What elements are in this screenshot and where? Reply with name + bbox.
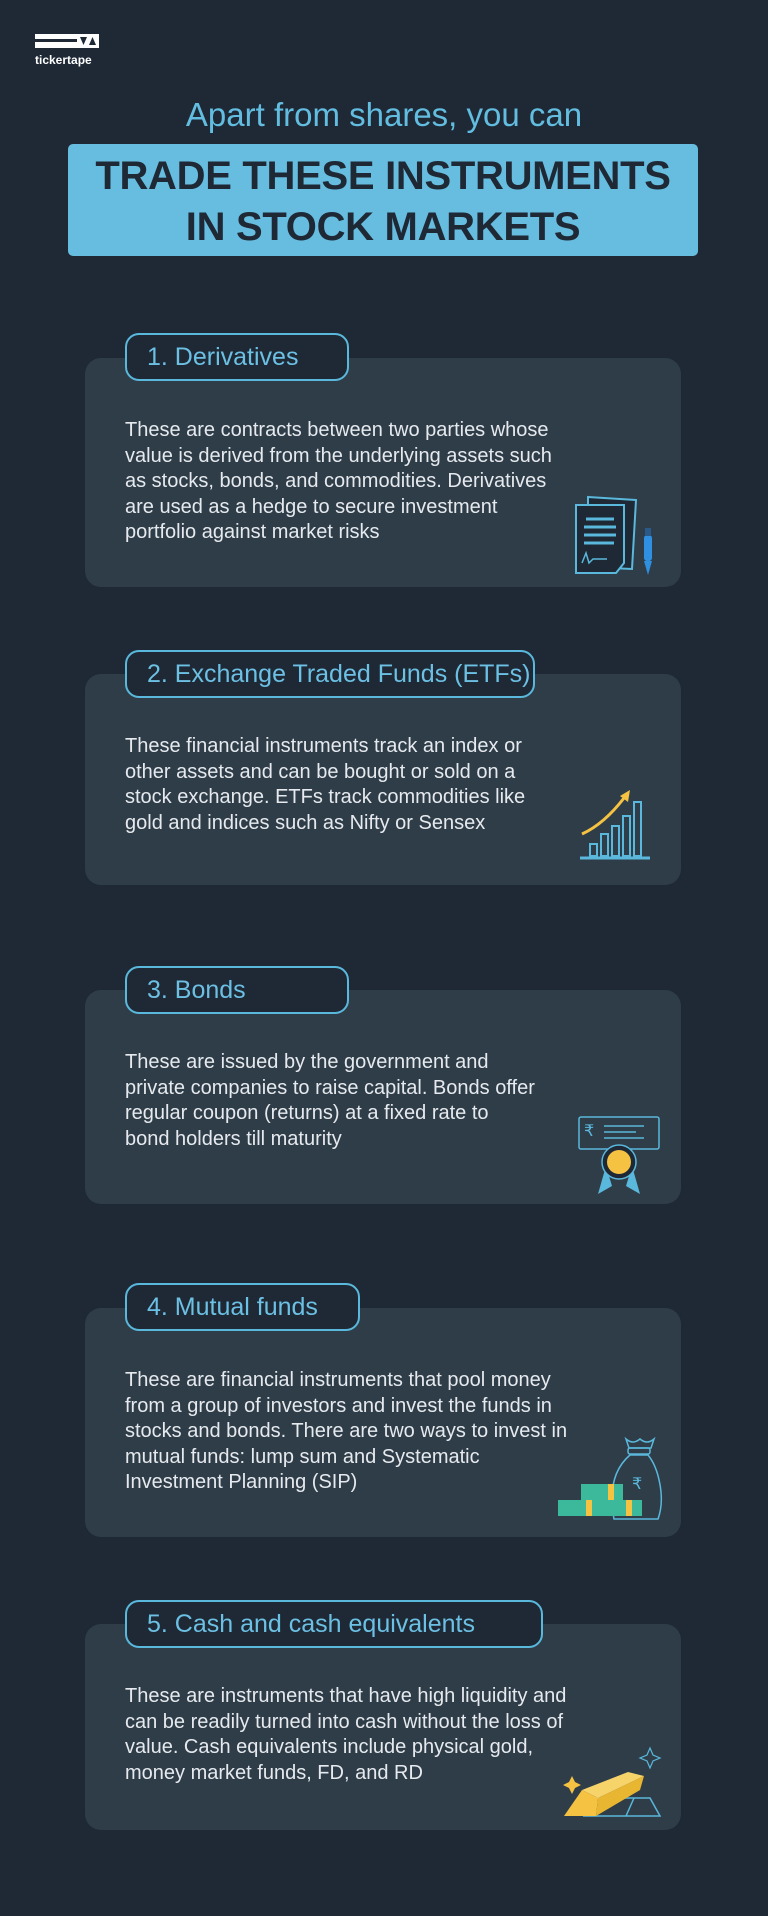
text: derivatives: are used as a hedge to secure investment <box>125 496 497 518</box>
text: bonds <box>125 1051 535 1150</box>
title box: IN STOCK MARKETS <box>186 205 580 249</box>
heading: bonds: 3. Bonds <box>147 976 246 1004</box>
logo <box>35 34 99 67</box>
icon: documents and pen <box>575 496 652 575</box>
text: derivatives: value is derived from the underlying assets such <box>125 445 552 467</box>
text: mutual funds: These are financial instruments that pool money <box>125 1369 551 1391</box>
text: bonds: These are issued by the government and <box>125 1051 489 1073</box>
text: derivatives: These are contracts between two parties whose <box>125 419 549 441</box>
heading: derivatives: 1. Derivatives <box>147 343 298 371</box>
heading: derivatives <box>125 333 349 381</box>
icon: bond certificate: ₹ <box>584 1121 594 1140</box>
text: mutual funds: stocks and bonds. There are two ways to invest in <box>125 1420 567 1442</box>
panel: ETFs <box>85 674 681 885</box>
title box: TRADE THESE INSTRUMENTS <box>95 154 671 198</box>
heading: bonds <box>125 966 349 1014</box>
icon: growth chart <box>580 790 650 860</box>
logo: tickertape <box>35 53 92 67</box>
text: mutual funds: mutual funds: lump sum and Systematic <box>125 1446 480 1468</box>
text: mutual funds: from a group of investors and invest the funds in <box>125 1395 552 1417</box>
text: bonds: bond holders till maturity <box>125 1128 342 1150</box>
panel: derivatives <box>85 358 681 587</box>
heading: cash equivalents <box>125 1600 543 1648</box>
text: bonds: private companies to raise capital. Bonds offer <box>125 1077 535 1099</box>
text: cash equivalents: can be readily turned into cash without the loss of <box>125 1711 563 1733</box>
text: cash equivalents <box>125 1685 566 1784</box>
title box <box>68 144 698 256</box>
icon: gold bar <box>563 1746 662 1817</box>
text: cash equivalents: money market funds, FD, and RD <box>125 1762 423 1784</box>
icon: money bag and notes: ₹ <box>632 1474 642 1493</box>
text: ETFs: stock exchange. ETFs track commodities like <box>125 786 525 808</box>
text: mutual funds <box>125 1369 567 1493</box>
heading: ETFs <box>125 650 535 698</box>
heading: mutual funds <box>125 1283 360 1331</box>
text: derivatives: as stocks, bonds, and commodities. Derivatives <box>125 470 546 492</box>
text: derivatives <box>125 419 552 543</box>
panel: mutual funds <box>85 1308 681 1537</box>
text: ETFs: other assets and can be bought or sold on a <box>125 761 515 783</box>
icon: money bag and notes <box>558 1437 662 1520</box>
text: cash equivalents: value. Cash equivalents include physical gold, <box>125 1736 533 1758</box>
heading: ETFs: 2. Exchange Traded Funds (ETFs) <box>147 660 531 688</box>
text: mutual funds: Investment Planning (SIP) <box>125 1471 357 1493</box>
heading: cash equivalents: 5. Cash and cash equivalents <box>147 1610 475 1638</box>
text: cash equivalents: These are instruments that have high liquidity and <box>125 1685 566 1707</box>
text: bonds: regular coupon (returns) at a fixed rate to <box>125 1102 489 1124</box>
text: ETFs: These financial instruments track an index or <box>125 735 522 757</box>
subtitle: Apart from shares, you can <box>186 96 582 133</box>
heading: mutual funds: 4. Mutual funds <box>147 1293 318 1321</box>
icon: bond certificate <box>578 1116 660 1194</box>
text: derivatives: portfolio against market risks <box>125 521 380 543</box>
panel: cash equivalents <box>85 1624 681 1830</box>
panel: bonds <box>85 990 681 1204</box>
text: ETFs: gold and indices such as Nifty or Sensex <box>125 812 485 834</box>
text: ETFs <box>125 735 525 834</box>
